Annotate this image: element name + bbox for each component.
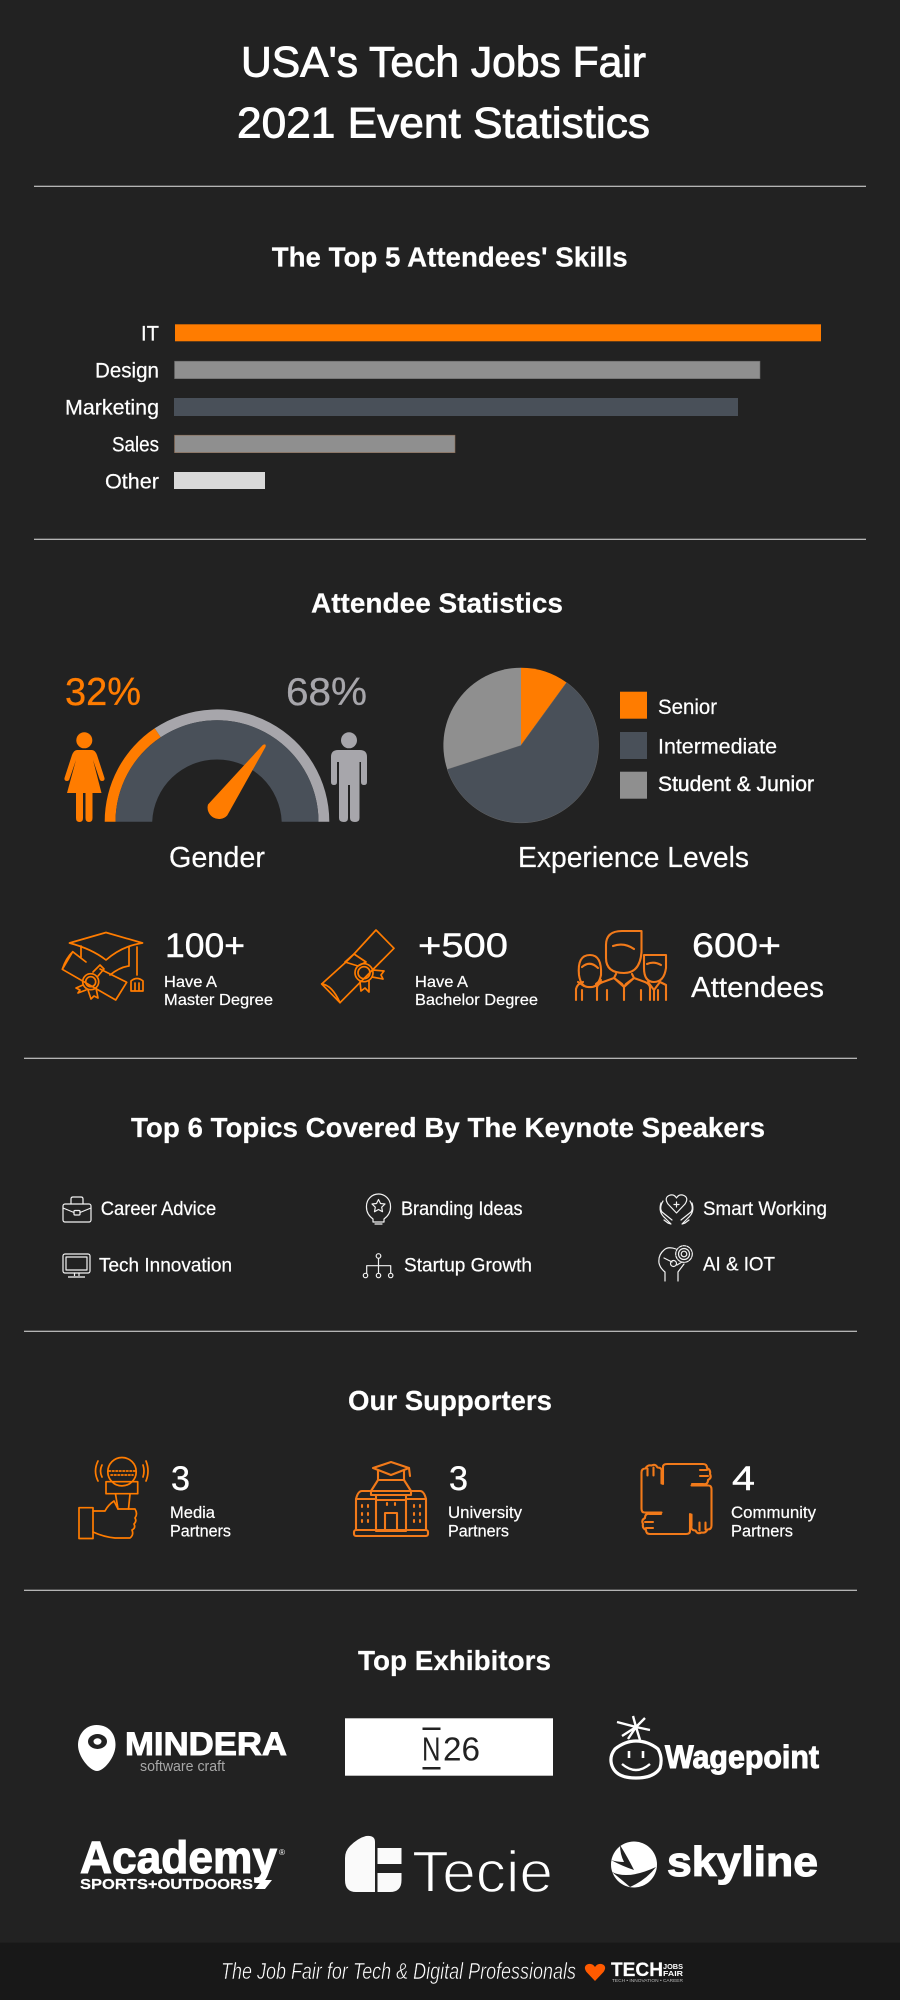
topic: ai and iot [659,1246,775,1281]
stat: master degree: Master Degree [164,992,273,1009]
icon: diploma [322,930,394,1003]
topic: career advice [63,1197,216,1222]
topic: smart working: Smart Working [703,1199,827,1220]
panel: keynote topics [63,1112,827,1281]
heading: skills: The Top 5 Attendees' Skills [272,242,628,273]
topic: branding ideas [366,1194,523,1224]
pie chart: experience levels [443,668,814,874]
icon: monitor [63,1254,90,1278]
logo: tech jobs fair: TECH • INNOVATION • CAREER [612,1978,683,1983]
bar chart: skills: IT [141,323,159,346]
logo: mindera: software craft [140,1758,226,1775]
stat: bachelor degree [322,927,538,1009]
icon: hands holding heart [660,1195,693,1224]
icon: briefcase [63,1197,91,1222]
logo: wagepoint: Wagepoint [665,1739,819,1775]
label: 32 percent: 32% [65,671,141,714]
topic: smart working [660,1195,827,1224]
panel: our supporters [79,1385,817,1541]
icon: man [331,732,367,822]
icon: group of people [576,931,666,1000]
stat: bachelor degree: +500 [418,927,508,965]
panel: top 5 attendees' skills [65,242,821,493]
topic: tech innovation: Tech Innovation [99,1256,232,1277]
logo: skyline: skyline [667,1838,818,1885]
topic: ai and iot: AI & IOT [703,1255,775,1276]
logo: tech jobs fair: TECH [611,1960,663,1981]
label: 68 percent: 68% [286,671,367,714]
title: 2021 Event Statistics [237,99,650,147]
logo: n26: 26 [443,1731,480,1768]
icon: organisation tree [363,1254,393,1278]
stat: attendees: 600+ [692,927,781,965]
supporter: media partners: 3 [171,1460,190,1498]
supporter: media partners [79,1458,231,1541]
title [237,39,650,147]
bar chart: skills: Sales [112,433,159,456]
bar chart: skills: Marketing [65,396,159,420]
heading: our supporters: Our Supporters [348,1385,552,1416]
topic: career advice: Career Advice [101,1199,216,1220]
logo: n26: N [422,1731,440,1768]
supporter: media partners: Media [170,1504,216,1522]
icon: hand holding microphone [79,1458,148,1538]
logo: skyline [611,1838,818,1888]
logo: wagepoint [611,1716,819,1778]
panel: attendee statistics [62,588,824,1009]
stat: attendees: Attendees [691,972,824,1004]
topic: branding ideas: Branding Ideas [401,1199,523,1220]
title: USA's Tech Jobs Fair [241,39,646,87]
gauge needle [208,744,266,819]
bar chart: skills [65,323,821,493]
gauge chart: gender [64,671,367,874]
supporter: media partners: Partners [170,1523,231,1541]
supporter: university partners: University [448,1504,523,1522]
logo: mindera [78,1725,287,1775]
stat: attendees [576,927,824,1004]
icon: university building [354,1462,428,1536]
supporter: community partners: Community [731,1504,817,1522]
gauge arcs [105,709,329,822]
logo: tech jobs fair: JOBS [663,1964,683,1971]
label: experience levels: Experience Levels [518,842,749,874]
logo: n26 [345,1718,553,1776]
supporter: community partners [642,1460,817,1541]
stat: master degree [62,927,273,1009]
logo: academy sports and outdoors: Academy [80,1832,277,1883]
bar chart: skills: Other [105,470,159,493]
footer tagline: The Job Fair for Tech & Digital Professionals [221,1958,576,1984]
panel: top exhibitors [78,1645,819,1905]
stat: bachelor degree: Have A [415,974,468,991]
logo: tecie: Tecie [412,1840,553,1905]
icon: interlocked hands [642,1464,712,1534]
topic: startup growth: Startup Growth [404,1256,532,1277]
stat: master degree: 100+ [165,927,245,965]
bar chart: skills: Design [95,360,159,382]
supporter: university partners [354,1460,523,1541]
heading: attendee statistics: Attendee Statistics [311,588,563,618]
logo: academy sports and outdoors: ® [279,1848,285,1857]
icon: graduation cap and diploma [62,932,143,1000]
label: gender: Gender [169,842,265,874]
logo: academy sports and outdoors: SPORTS+OUTDOORS [80,1876,253,1893]
logo: tech jobs fair: FAIR [663,1971,683,1978]
stat: bachelor degree: Bachelor Degree [415,992,538,1009]
legend [620,692,814,799]
supporter: community partners: 4 [732,1460,755,1498]
logo: mindera: MINDERA [125,1726,287,1762]
legend: Student & Junior [658,773,814,796]
footer band [0,1943,900,2000]
icon: woman [64,732,105,822]
heading: keynote topics: Top 6 Topics Covered By The Keynote Speakers [131,1112,765,1143]
stat: master degree: Have A [164,974,217,991]
supporter: community partners: Partners [731,1523,793,1541]
heading: top exhibitors: Top Exhibitors [358,1645,551,1676]
topic: startup growth [363,1254,532,1278]
legend: Senior [658,696,717,719]
supporter: university partners: Partners [448,1523,509,1541]
logo: tech jobs fair [611,1960,683,1983]
logo: tecie [345,1836,553,1905]
icon: head with gear [659,1246,692,1281]
legend: Intermediate [658,736,777,758]
icon: light bulb with star [366,1194,391,1224]
icon: heart [585,1964,605,1981]
supporter: university partners: 3 [449,1460,468,1498]
topic: tech innovation [63,1254,232,1278]
